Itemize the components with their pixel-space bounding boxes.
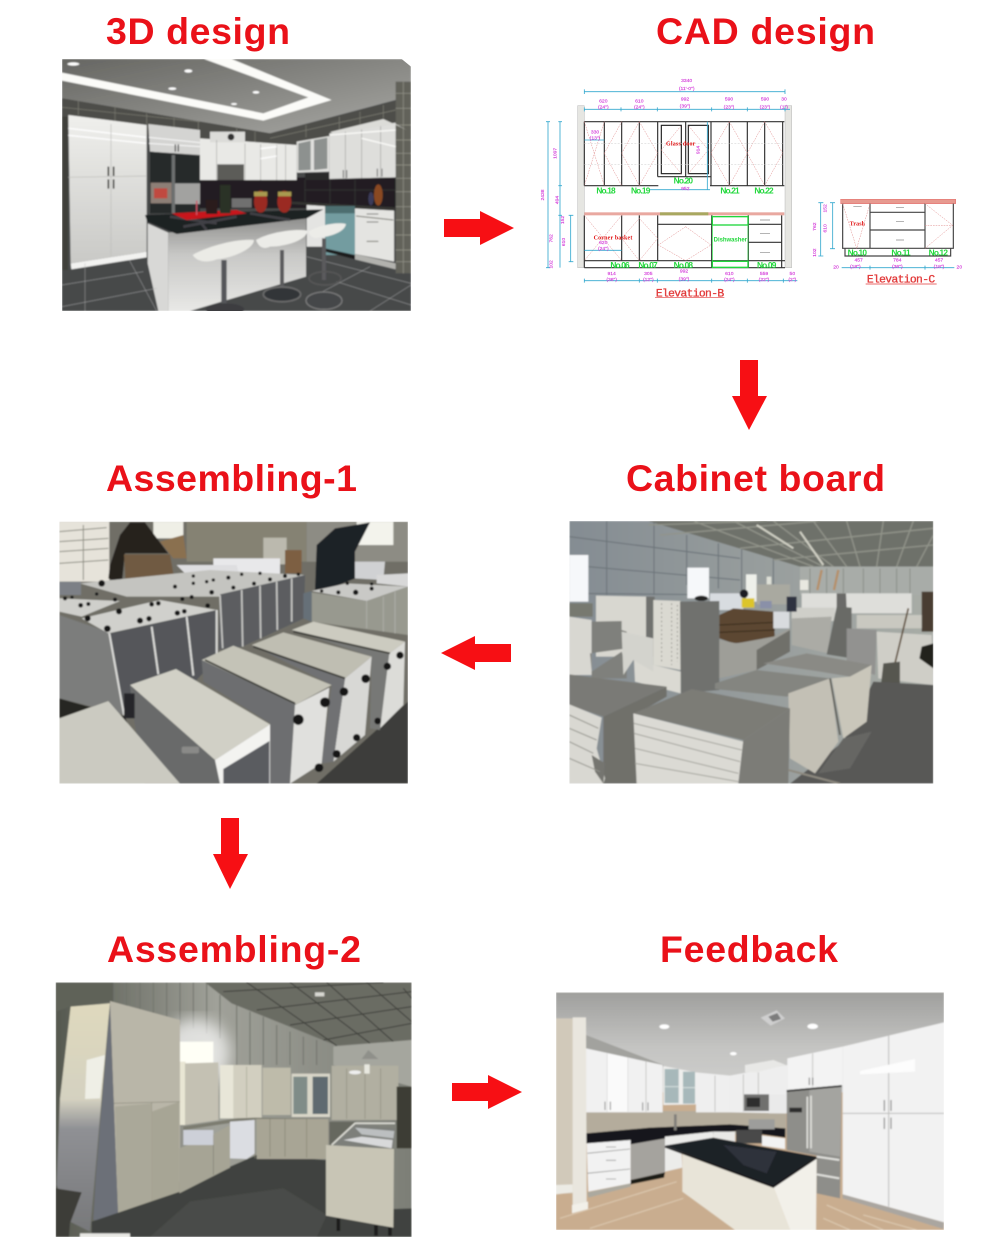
dimension text: (24") <box>724 277 735 283</box>
dimension text: 762 <box>812 222 818 231</box>
cabinet numbers: No.21 <box>720 185 740 195</box>
dimension text: 762 <box>549 234 555 242</box>
cabinet numbers: No.10 <box>848 248 867 258</box>
dimension text: (13") <box>590 135 601 141</box>
title: Assembling-2: Assembling-2 <box>107 928 361 970</box>
dimension text: 152 <box>560 216 566 224</box>
dimension text: 3340 <box>681 78 692 84</box>
arrow: 3D to CAD <box>444 211 514 245</box>
photo: assembled cabinets in workshop <box>56 982 412 1237</box>
dimension text: (1") <box>780 105 788 111</box>
dimension text: 50 <box>790 271 795 277</box>
dimension text: (24") <box>598 246 609 252</box>
dimension text: 559 <box>760 271 768 277</box>
label: Elevation-B: Elevation-B <box>656 289 724 301</box>
title: 3D design: 3D design <box>106 10 290 52</box>
cabinet numbers: Corner basket <box>594 235 632 241</box>
title: CAD design: CAD design <box>656 10 875 52</box>
dimension text: 305 <box>644 271 653 277</box>
dimension text: (11'-0") <box>679 86 695 92</box>
cabinet numbers: No.06 <box>610 260 630 270</box>
dimension text: 620 <box>599 240 608 246</box>
dimension text: (36") <box>892 264 903 270</box>
elevation B structure <box>578 106 792 268</box>
title: Feedback: Feedback <box>660 928 838 970</box>
dimension text: (23") <box>724 105 735 111</box>
dimension text: 914 <box>695 146 701 154</box>
cabinet numbers: No.12 <box>929 248 948 258</box>
label: Elevation-C: Elevation-C <box>867 275 935 287</box>
cabinet numbers: No.09 <box>757 260 777 270</box>
cabinet numbers: No.11 <box>891 248 911 258</box>
dimension text: (24") <box>634 105 645 111</box>
dimension text: 914 <box>608 271 616 277</box>
photo: 3D kitchen rendering <box>62 59 411 315</box>
arrow: Assembling-2 to Feedback <box>452 1075 522 1109</box>
dimension text: 952 <box>681 186 690 192</box>
dimension text: 152 <box>823 204 829 212</box>
dimension text <box>540 78 962 283</box>
cabinet numbers: No.22 <box>754 185 774 195</box>
dimension text: (12") <box>643 277 654 283</box>
dimension text: 30 <box>781 97 787 103</box>
arrow: Cabinet board to Assembling-1 <box>441 636 511 670</box>
dimension text: (39") <box>680 103 691 109</box>
cabinet numbers: Glass door <box>666 142 696 148</box>
dimension text: 590 <box>761 97 769 103</box>
dimension text: (2") <box>788 277 797 283</box>
dimension text: 20 <box>833 264 839 270</box>
dimension text: 590 <box>725 97 733 103</box>
dimension text: 992 <box>680 269 688 275</box>
dimension text: 610 <box>635 99 644 105</box>
dimension text: (22") <box>759 277 770 283</box>
dimension text: 457 <box>935 258 943 264</box>
dimension text: 610 <box>725 271 734 277</box>
dimension text: 457 <box>854 258 863 264</box>
dimension text: (24") <box>598 105 609 111</box>
cabinet numbers: No.08 <box>674 260 693 270</box>
cabinet numbers: No.07 <box>638 260 658 270</box>
elevation C structure <box>841 199 956 256</box>
cabinet numbers: Dishwasher <box>714 237 748 243</box>
dimension text: 620 <box>599 99 608 105</box>
dimension text: 102 <box>812 248 818 257</box>
title: Cabinet board: Cabinet board <box>626 457 885 499</box>
dimension text: (36") <box>606 277 617 283</box>
dimension text: (18") <box>934 264 945 270</box>
photo: cabinets assembling <box>59 522 408 784</box>
dimension text: 494 <box>555 196 561 204</box>
dimension text: 1097 <box>553 148 559 159</box>
dimension text: 102 <box>549 260 555 268</box>
dimension text: 610 <box>561 238 567 246</box>
dimension text: 610 <box>823 224 829 232</box>
cabinet numbers: No.20 <box>674 176 693 186</box>
dimension text: 784 <box>893 258 902 264</box>
dimension text: 992 <box>681 97 689 103</box>
underline C <box>866 283 937 285</box>
dimension text: (23") <box>760 105 771 111</box>
cabinet numbers: No.19 <box>631 185 651 195</box>
dimension text: 330 <box>591 129 599 135</box>
dimension text: 20 <box>957 264 962 270</box>
title: Assembling-1: Assembling-1 <box>106 457 357 499</box>
arrow: CAD to Cabinet board <box>732 360 767 430</box>
photo: finished kitchen feedback <box>556 992 944 1230</box>
dimension lines <box>546 89 954 283</box>
cabinet numbers: No.18 <box>596 185 616 195</box>
arrow: Assembling-1 to Assembling-2 <box>213 818 248 889</box>
dimension text: (39") <box>679 277 690 283</box>
cabinet numbers <box>594 142 948 270</box>
photo: stacks of cabinet boards in warehouse <box>569 521 933 784</box>
dimension text: (18") <box>850 264 861 270</box>
CAD drawing <box>540 78 962 301</box>
underline B <box>655 297 724 299</box>
cabinet numbers: Trash <box>850 221 866 227</box>
dimension text: 2438 <box>540 189 546 201</box>
